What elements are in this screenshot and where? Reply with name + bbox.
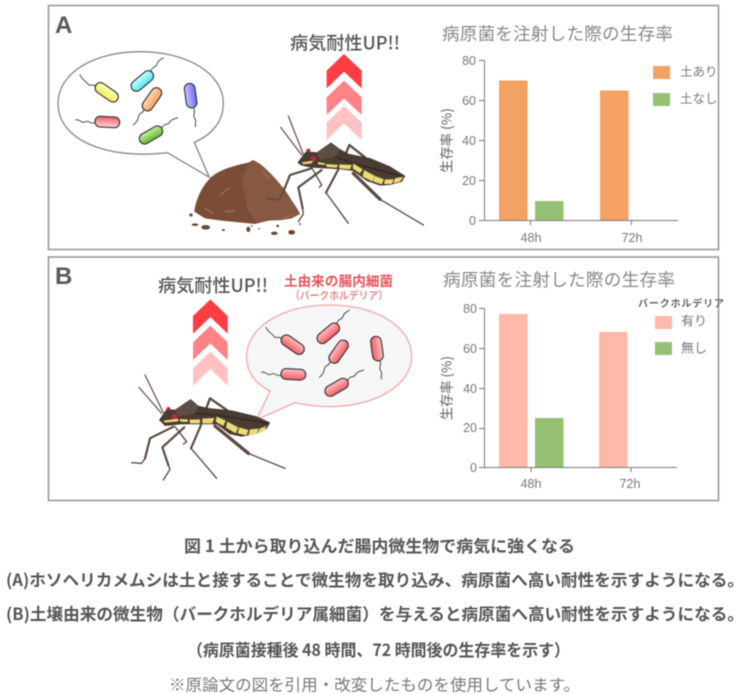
figure title: 図 1 土から取り込んだ腸内微生物で病気に強くなる: [184, 533, 575, 557]
legend B: [638, 295, 724, 356]
bar chart B: 生存率 (%): [436, 356, 456, 420]
panel letter A: A: [55, 12, 72, 39]
legend A: [653, 61, 718, 107]
bar chart B: 0: [470, 461, 477, 475]
bar chart B: 20: [463, 421, 477, 435]
label: soil-derived gut bacteria: （バークホルデリア）: [290, 288, 388, 303]
bar chart B: 80: [463, 302, 477, 316]
speech bubble with gut bacteria: [247, 305, 412, 420]
bar chart B: 40: [463, 382, 477, 396]
caption line B: (B)土壌由来の微生物（バークホルデリア属細菌）を与えると病原菌へ高い耐性を示すようになる。: [6, 601, 744, 625]
panel: B gut bacteria: [48, 257, 724, 500]
arrow: rising disease resistance: [193, 299, 228, 386]
panel: A soil contact: [48, 6, 718, 250]
legend B: 無し: [681, 338, 707, 356]
heading: resistance up A: 病気耐性UP!!: [290, 30, 400, 56]
legend A: 土あり: [680, 61, 718, 80]
legend A: 土なし: [680, 88, 718, 107]
arrow: rising disease resistance: [327, 54, 362, 140]
bar chart A: 80: [462, 54, 476, 68]
caption note on timing: （病原菌接種後 48 時間、72 時間後の生存率を示す）: [187, 637, 570, 661]
chart title B: 病原菌を注射した際の生存率: [443, 267, 675, 292]
bar chart A: 40: [462, 134, 476, 148]
bar chart A: 生存率 (%): [436, 108, 456, 173]
bar chart A: 20: [462, 174, 476, 188]
panel letter B: B: [55, 263, 72, 290]
speech bubble with soil microbes: [58, 52, 223, 177]
legend B: 有り: [681, 310, 707, 330]
bar chart A: 0: [469, 214, 476, 228]
caption line A: (A)ホソヘリカメムシは土と接することで微生物を取り込み、病原菌へ高い耐性を示すようになる。: [6, 567, 744, 591]
soil mound: [189, 160, 301, 235]
label: soil-derived gut bacteria: 土由来の腸内細菌: [284, 270, 393, 290]
insect: [132, 375, 285, 480]
insect on soil: [266, 116, 423, 225]
bar chart B: 72h: [620, 477, 640, 491]
bar chart B: 48h: [521, 477, 541, 491]
heading: resistance up B: 病気耐性UP!!: [158, 272, 268, 298]
label: soil-derived gut bacteria: [284, 270, 393, 303]
bar chart A: 48h: [521, 231, 541, 245]
bar chart A: 72h: [622, 231, 642, 245]
bar chart A: [436, 54, 678, 245]
legend B: バークホルデリア: [638, 295, 724, 310]
bar chart A: 60: [462, 94, 476, 108]
bar chart B: 60: [463, 342, 477, 356]
bar chart B: [436, 302, 677, 491]
chart title A: 病原菌を注射した際の生存率: [442, 21, 673, 46]
caption: [6, 533, 744, 694]
